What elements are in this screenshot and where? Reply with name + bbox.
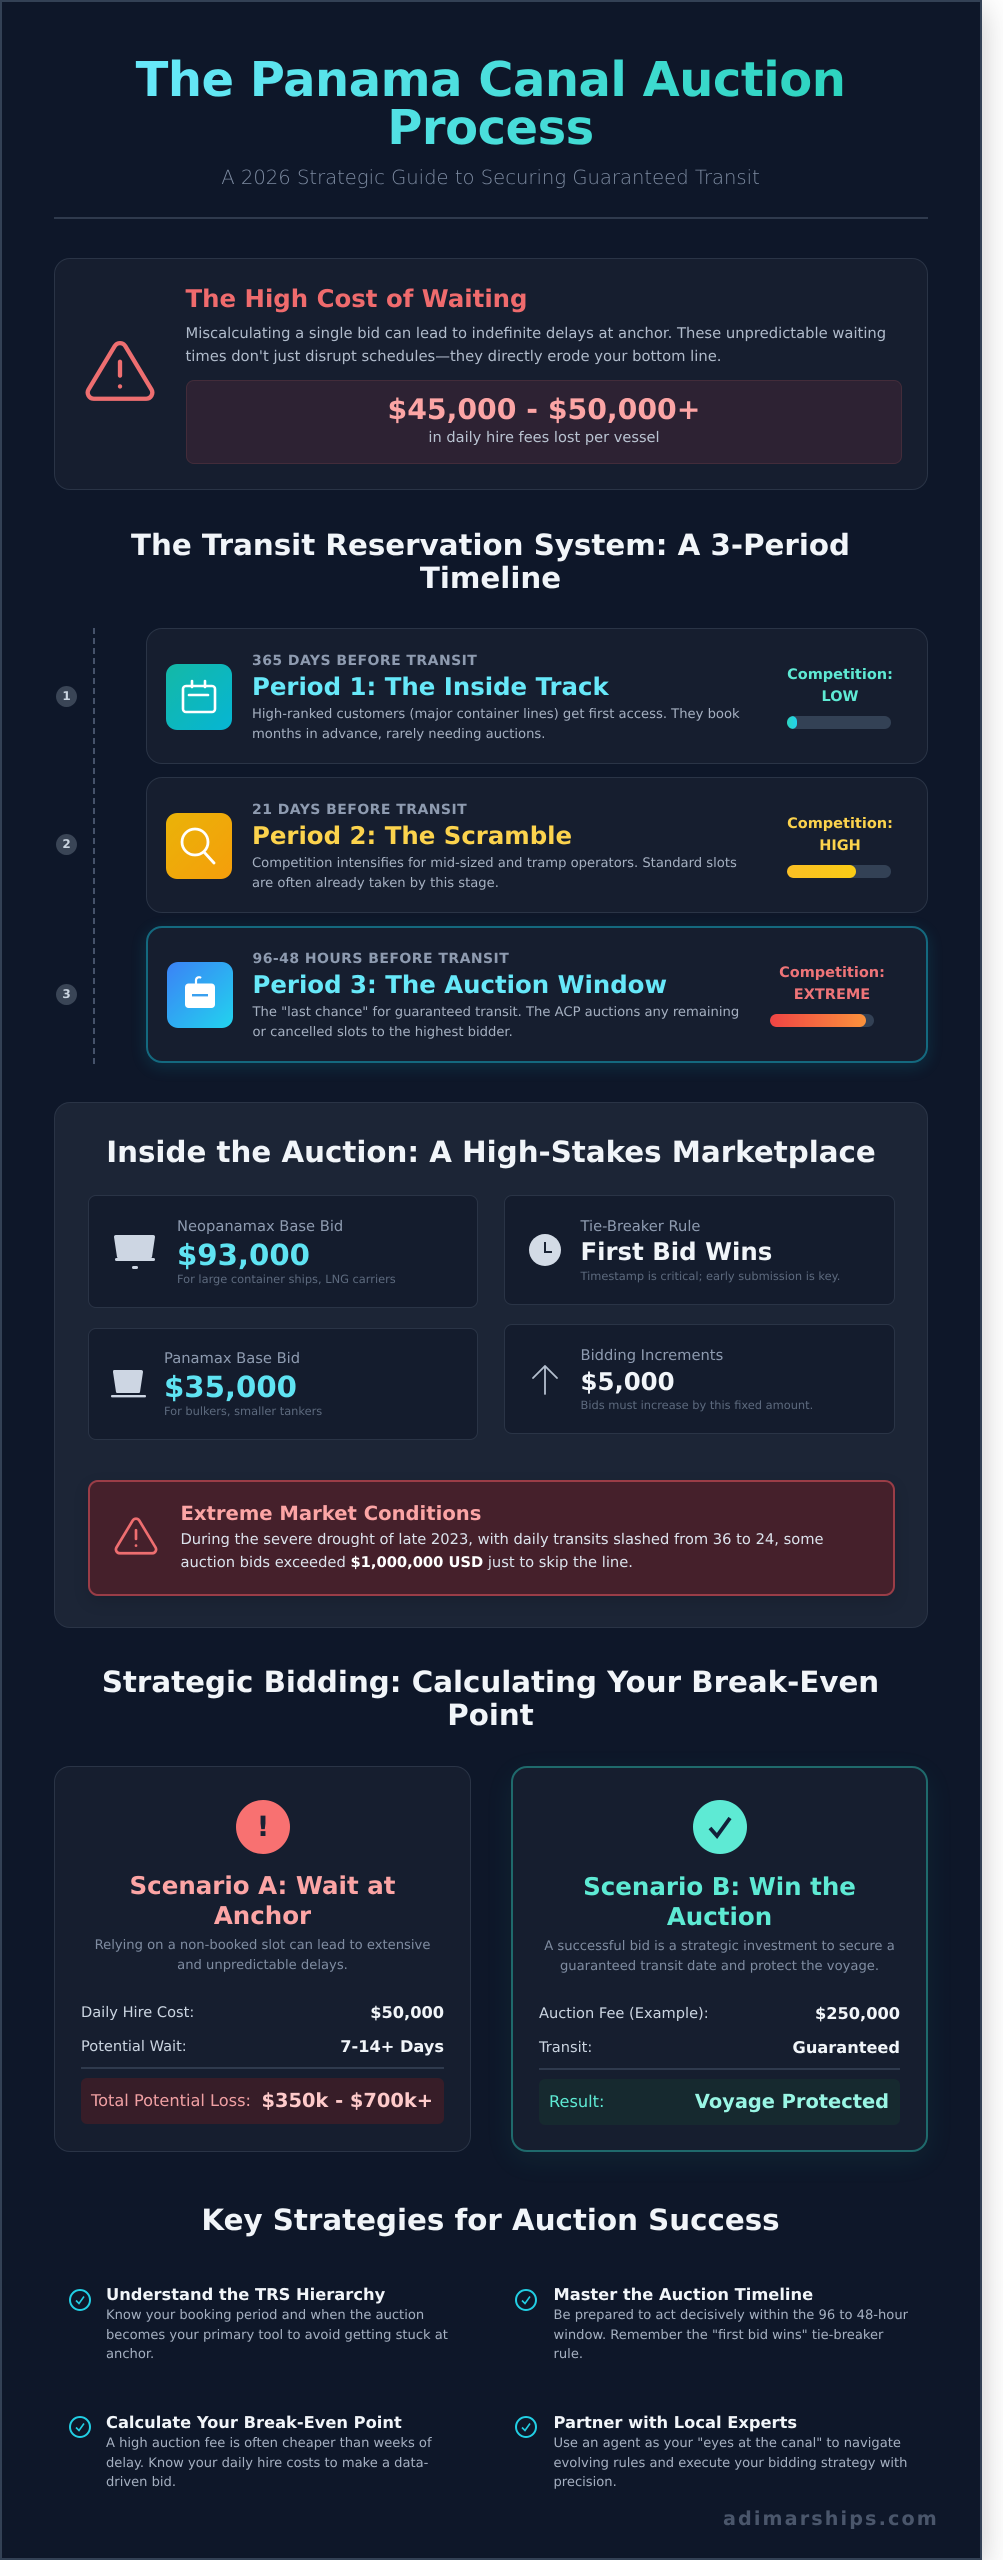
scenario title: Auction: [667, 1902, 772, 1931]
strategy text: [554, 2436, 908, 2490]
note: Timestamp is critical; early submission is key.: [580, 1269, 840, 1283]
competition bar: [770, 1014, 874, 1027]
strategy text: becomes your primary tool to avoid getting stuck at: [106, 2328, 448, 2343]
panel: inside the auction: [54, 1102, 928, 1628]
label: Neopanamax Base Bid: [177, 1218, 343, 1235]
heading: transit reservation system: [131, 528, 850, 595]
strategy: calculate your break-even point: [69, 2413, 432, 2490]
period label: 96-48 HOURS BEFORE TRANSIT: [252, 951, 509, 967]
scenario description: guaranteed transit date and protect the voyage.: [560, 1959, 879, 1974]
heading: strategic bidding: [102, 1665, 879, 1732]
value: $35,000: [164, 1370, 297, 1404]
period title: Period 3: The Auction Window: [252, 970, 667, 999]
period description: are often already taken by this stage.: [252, 876, 499, 890]
icon: check: [515, 2416, 537, 2438]
period title: Period 1: The Inside Track: [252, 672, 609, 701]
panel: period 2: [146, 777, 928, 913]
period description: [252, 1005, 739, 1040]
strategy text: Use an agent as your "eyes at the canal" to navigate: [554, 2436, 901, 2451]
body text: times don't just disrupt schedules—they directly erode your bottom line.: [186, 348, 721, 364]
competition label: HIGH: [819, 838, 861, 854]
competition label: LOW: [821, 689, 859, 705]
period description: High-ranked customers (major container lines) get first access. They book: [252, 707, 740, 722]
icon: check: [69, 2416, 91, 2438]
strategy text: evolving rules and execute your bidding strategy with: [554, 2456, 908, 2471]
period label: 21 DAYS BEFORE TRANSIT: [252, 802, 467, 818]
callout text: During the severe drought of late 2023, with daily transits slashed from 36 to 24, some: [180, 1530, 824, 1548]
icon: check circle: [693, 1800, 747, 1854]
label: Bidding Increments: [580, 1347, 723, 1364]
value: $5,000: [580, 1367, 675, 1396]
scenario description: A successful bid is a strategic investment to secure a: [544, 1939, 895, 1954]
scenario title: Scenario A: Wait at: [130, 1871, 395, 1900]
competition label: Competition:: [787, 667, 893, 683]
competition label: Competition:: [779, 965, 885, 981]
label: Tie-Breaker Rule: [580, 1218, 700, 1235]
strategy text: driven bid.: [106, 2475, 176, 2490]
heading: transit reservation system: The Transit Reservation System: A 3-Period: [131, 528, 850, 562]
competition label: [787, 667, 893, 705]
period description: [252, 707, 740, 742]
title: [0, 56, 981, 152]
scenario title: Anchor: [214, 1901, 311, 1930]
strategy: partner with local experts: [515, 2413, 908, 2490]
body text: Miscalculating a single bid can lead to indefinite delays at anchor. These unpredictable waiting: [186, 324, 886, 342]
row: auction fee: [539, 2004, 900, 2023]
card: tie breaker: [504, 1195, 895, 1305]
panel: scenario A: [54, 1766, 471, 2152]
card: panamax: [88, 1328, 478, 1440]
row label: Daily Hire Cost:: [81, 2004, 194, 2021]
heading: strategic bidding: Point: [447, 1698, 534, 1732]
card: neopanamax: [88, 1195, 478, 1308]
step number 1: [56, 686, 77, 707]
strategy text: window. Remember the "first bid wins" tie-breaker: [554, 2328, 883, 2343]
icon: small ship: [111, 1370, 146, 1398]
stat box: [186, 380, 902, 464]
result label: Total Potential Loss:: [91, 2091, 251, 2110]
row: transit: [538, 2038, 900, 2056]
value: First Bid Wins: [580, 1237, 772, 1266]
icon: magnifier: [166, 813, 232, 879]
step number 3: [56, 984, 77, 1005]
scenario description: and unpredictable delays.: [177, 1958, 348, 1973]
callout title: Extreme Market Conditions: [180, 1502, 481, 1525]
heading: key strategies: Key Strategies for Auction Success: [201, 2203, 780, 2237]
row label: Auction Fee (Example):: [539, 2005, 709, 2022]
note: For bulkers, smaller tankers: [164, 1404, 322, 1418]
period description: The "last chance" for guaranteed transit. The ACP auctions any remaining: [252, 1005, 739, 1020]
competition label: [779, 965, 885, 1003]
row value: 7-14+ Days: [340, 2037, 444, 2056]
competition label: Competition:: [787, 816, 893, 832]
label: Panamax Base Bid: [164, 1350, 300, 1367]
strategy title: Partner with Local Experts: [554, 2413, 797, 2432]
strategy: understand the TRS hierarchy: [69, 2285, 448, 2362]
callout text: [180, 1530, 824, 1570]
icon: alert circle: [236, 1800, 290, 1854]
scenario description: [544, 1939, 895, 1974]
strategy text: Know your booking period and when the auction: [106, 2308, 424, 2323]
icon: warning triangle: [86, 341, 154, 401]
period description: [252, 856, 737, 890]
panel: scenario B: [511, 1766, 928, 2152]
icon: briefcase: [167, 962, 233, 1028]
competition bar: [787, 716, 891, 729]
competition label: EXTREME: [794, 987, 870, 1003]
scenario title: Scenario B: Win the: [583, 1872, 856, 1901]
footer: website: adimarships.com: [723, 2507, 939, 2530]
result value: Voyage Protected: [695, 2090, 889, 2113]
icon: up arrow: [532, 1365, 558, 1395]
body text: [186, 324, 886, 364]
result label: Result:: [549, 2092, 604, 2111]
title: The Panama Canal Auction: [136, 52, 845, 108]
row value: Guaranteed: [793, 2038, 900, 2056]
result box: voyage protected: [539, 2079, 900, 2125]
strategy text: A high auction fee is often cheaper than weeks of: [106, 2436, 432, 2451]
step number 3: 3: [62, 987, 71, 1001]
strategy title: Understand the TRS Hierarchy: [106, 2285, 385, 2304]
period label: 365 DAYS BEFORE TRANSIT: [252, 653, 477, 669]
icon: check: [515, 2289, 537, 2311]
strategy text: Be prepared to act decisively within the 96 to 48-hour: [554, 2308, 908, 2323]
panel: high cost of waiting: [54, 258, 928, 490]
scenario title: [130, 1871, 395, 1930]
row label: Transit:: [539, 2038, 592, 2056]
strategy text: anchor.: [106, 2347, 154, 2362]
row: daily hire cost: [81, 2003, 444, 2022]
row label: Potential Wait:: [81, 2038, 187, 2055]
result value: $350k - $700k+: [261, 2089, 433, 2112]
title: Process: [387, 100, 594, 156]
period description: Competition intensifies for mid-sized and tramp operators. Standard slots: [252, 856, 737, 871]
icon: clock: [529, 1234, 561, 1266]
icon: warning triangle: [114, 1517, 158, 1555]
scenario description: Relying on a non-booked slot can lead to extensive: [95, 1938, 430, 1953]
strategy text: [106, 2436, 432, 2490]
stat value: $45,000 - $50,000+: [388, 393, 700, 426]
note: Bids must increase by this fixed amount.: [580, 1398, 813, 1412]
strategy text: precision.: [554, 2475, 617, 2490]
card: bidding increments: [504, 1324, 895, 1434]
panel: period 1: [146, 628, 928, 764]
strategy title: Calculate Your Break-Even Point: [106, 2413, 402, 2432]
step number 1: 1: [62, 689, 71, 703]
competition bar: [787, 865, 891, 878]
period description: or cancelled slots to the highest bidder.: [252, 1024, 513, 1040]
step number 2: [56, 834, 77, 855]
icon: alert circle: !: [257, 1810, 269, 1843]
timeline rail: [93, 628, 95, 1064]
scenario description: [95, 1938, 430, 1973]
row: potential wait: [81, 2037, 444, 2056]
callout text: auction bids exceeded $1,000,000 USD just to skip the line.: [180, 1554, 633, 1570]
note: For large container ships, LNG carriers: [177, 1272, 396, 1286]
row value: $50,000: [370, 2003, 444, 2022]
period title: Period 2: The Scramble: [252, 821, 572, 850]
heading: strategic bidding: Strategic Bidding: Calculating Your Break-Even: [102, 1665, 879, 1699]
result box: total loss: [81, 2078, 444, 2124]
scenario title: [583, 1872, 856, 1931]
subtitle: A 2026 Strategic Guide to Securing Guaranteed Transit: [221, 166, 760, 189]
heading: The High Cost of Waiting: [186, 284, 528, 313]
strategy title: Master the Auction Timeline: [554, 2285, 813, 2304]
icon: check: [69, 2289, 91, 2311]
strategy text: [554, 2308, 908, 2362]
stat caption: in daily hire fees lost per vessel: [428, 429, 660, 446]
strategy text: [106, 2308, 448, 2362]
value: $93,000: [177, 1238, 310, 1272]
heading: Inside the Auction: A High-Stakes Marketplace: [106, 1135, 876, 1169]
competition label: [787, 816, 893, 854]
step number 2: 2: [62, 837, 71, 851]
icon: calendar: [166, 664, 232, 730]
heading: transit reservation system: Timeline: [420, 561, 561, 595]
panel: period 3 highlighted: [146, 926, 928, 1063]
strategy text: delay. Know your daily hire costs to make a data-: [106, 2456, 428, 2471]
row value: $250,000: [815, 2004, 900, 2023]
strategy text: rule.: [554, 2347, 583, 2362]
period description: months in advance, rarely needing auctions.: [252, 726, 545, 742]
icon: large ship: [114, 1235, 155, 1269]
callout: extreme market conditions: [88, 1480, 895, 1596]
strategy: master the auction timeline: [515, 2285, 908, 2362]
